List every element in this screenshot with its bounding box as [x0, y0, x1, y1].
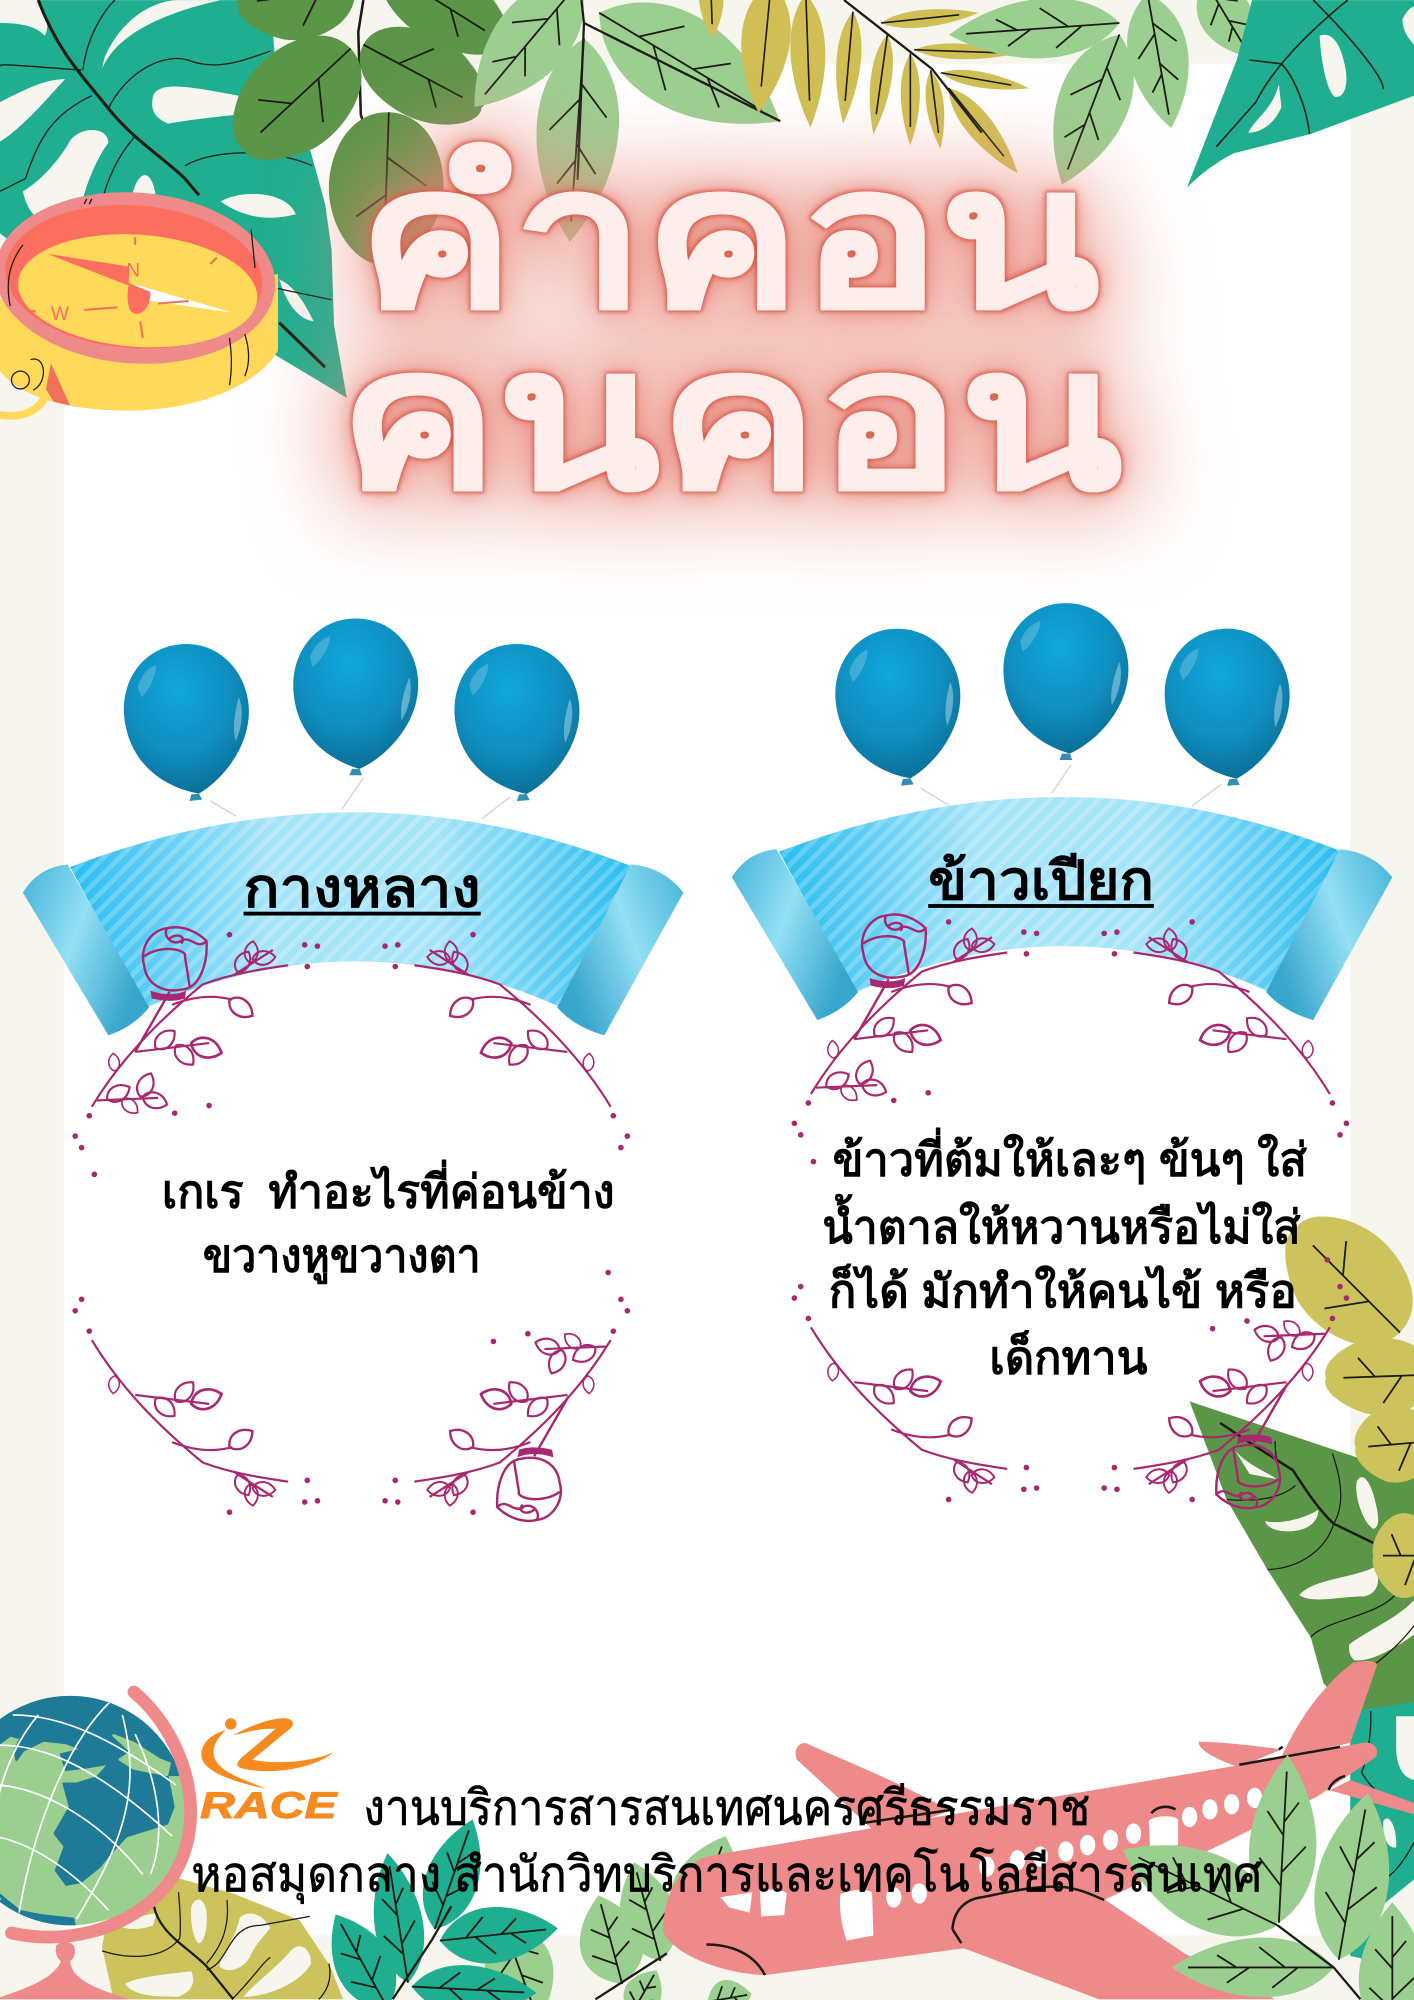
floral wreath right — [792, 915, 1349, 1508]
footer text: งานบริการสารสนเทศนครศรีธรรมราช — [363, 1782, 1090, 1836]
compass rim — [0, 183, 281, 373]
leaf cluster: dark green — [208, 0, 525, 266]
body text left: ขวางหูขวางตา — [203, 1229, 481, 1284]
teal leaves: bottom centre — [311, 1811, 561, 2000]
leaf cluster: bottom right — [1107, 1753, 1414, 2000]
compass: W — [51, 304, 69, 325]
body text left: เกเร ทำอะไรที่ค่อนข้าง — [162, 1160, 615, 1218]
race logo — [200, 1718, 338, 1826]
compass dial — [14, 226, 261, 355]
palm frond: olive — [698, 0, 1030, 181]
body text right: เด็กทาน — [989, 1329, 1148, 1383]
body text right: ก็ได้ มักทำให้คนไข้ หรือ — [829, 1263, 1297, 1317]
balloons right — [829, 603, 1296, 806]
olive leaves: right side — [1258, 1191, 1414, 1598]
compass — [0, 183, 281, 416]
teal leaf: bottom right — [1350, 1702, 1414, 1961]
monstera leaf: top right — [1187, 0, 1414, 187]
airplane — [663, 1661, 1414, 1999]
compass: N — [126, 261, 140, 282]
monstera leaf: top left — [0, 0, 347, 398]
heading left underline — [244, 912, 481, 916]
compass ring loop — [0, 386, 46, 416]
footer text — [191, 1782, 1263, 1904]
balloons left — [117, 618, 586, 819]
globe stand — [0, 1942, 130, 1999]
globe sphere — [0, 1696, 186, 1925]
compass body — [0, 274, 278, 411]
plane windows — [720, 1788, 1262, 1941]
body text right — [822, 1128, 1307, 1383]
leaf cluster: light green top right — [947, 0, 1273, 197]
heading right underline — [928, 904, 1154, 908]
plane lines — [706, 1747, 1345, 1975]
body text left — [162, 1160, 615, 1284]
heading left: กางหลาง — [244, 860, 481, 919]
monstera leaf: right side green — [1190, 1401, 1414, 1715]
title line 1: คำคอน — [358, 128, 1099, 348]
heading right: ข้าวเปียก — [928, 852, 1154, 911]
title — [339, 128, 1122, 529]
body text right: น้ำตาลให้หวานหรือไม่ใส่ — [822, 1193, 1301, 1253]
race logo: RACE — [200, 1785, 338, 1826]
green leaves behind plane — [472, 1825, 757, 2000]
plane rear wing — [796, 1743, 950, 1836]
floral wreath left — [72, 927, 630, 1521]
banner left — [23, 812, 683, 1035]
globe — [0, 1658, 191, 1999]
leaf cluster: light green top centre — [446, 0, 804, 245]
plane tail fins — [1199, 1661, 1414, 1814]
banner right — [732, 797, 1392, 1020]
olive monstera: bottom left — [102, 1877, 343, 1999]
globe meridian arc — [11, 1692, 191, 1937]
plane fuselage — [663, 1743, 1377, 1975]
footer text: หอสมุดกลาง สำนักวิทบริการและเทคโนโลยีสารสนเทศ — [191, 1847, 1263, 1904]
title line 2: คนคอน — [339, 309, 1122, 529]
body text right: ข้าวที่ต้มให้เละๆ ข้นๆ ใส่ — [833, 1128, 1307, 1186]
plane front wing — [955, 1889, 1275, 1999]
